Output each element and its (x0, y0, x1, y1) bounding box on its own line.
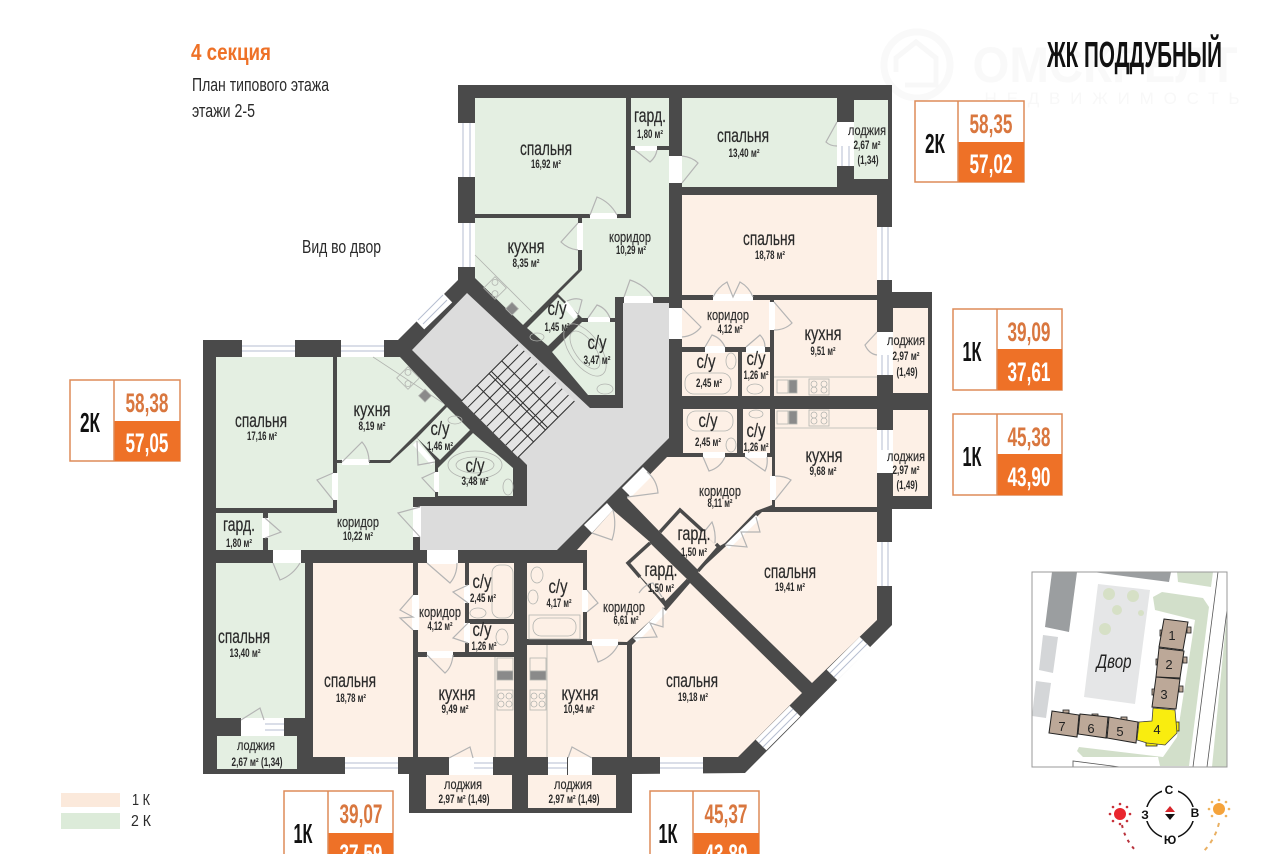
room label: corridor 4.12 south: 4,12 м² (428, 621, 453, 633)
compass: С (1165, 783, 1174, 797)
room label: bathroom 1.26 east: 1,26 м² (744, 370, 769, 382)
room label: bathroom 3.48: 3,48 м² (462, 476, 489, 488)
callout: 1K 45.37 (650, 791, 759, 854)
room label: corridor 10.22: 10,22 м² (343, 531, 373, 543)
room label: bathroom 3.48 (462, 456, 489, 488)
legend: 1 К (132, 792, 151, 809)
room label: bedroom 13.40 west (218, 627, 270, 660)
room label: loggia 2.97 east upper: лоджия (887, 332, 925, 348)
room label: loggia south 1: лоджия (444, 776, 482, 792)
room label: loggia 2.67 west: лоджия (237, 737, 275, 753)
map section 4 highlighted: 4 (1153, 722, 1161, 737)
callout: 1K 39.07: 1К (294, 818, 313, 849)
callout: 1K 39.09: 1К (962, 336, 982, 367)
room label: loggia south 2: 2,97 м² (1,49) (548, 794, 600, 806)
map building bumps (1063, 627, 1191, 746)
room label: kitchen 10.94 (562, 684, 598, 716)
room label: bathroom 4.17 (546, 577, 572, 610)
room label: kitchen 8.19 (354, 400, 390, 433)
room label: bedroom 18.78 south: 18,78 м² (336, 693, 366, 705)
room label: bathroom 2.45 east: 2,45 м² (696, 378, 722, 390)
room label: bathroom 2.45 east lower: с/у (698, 411, 718, 432)
room label: bathroom 1.46: 1,46 м² (427, 441, 453, 453)
room label: kitchen 9.51: кухня (804, 324, 842, 345)
map section 1: 1 (1168, 628, 1176, 643)
callout: 2K 58.38 (70, 380, 180, 461)
room label: bathroom 1.26 east: с/у (746, 349, 766, 370)
room label: loggia 2.97 east upper: (1,49) (896, 367, 918, 379)
plan subtitle: План типового этажа (192, 75, 330, 95)
room label: bathroom 2.45 south (470, 572, 496, 605)
room label: loggia 2.67 west (232, 737, 283, 769)
callout: 1K 39.07: 39,07 (340, 799, 382, 829)
room label: bathroom 1.26 east lower (744, 421, 769, 454)
door swings (241, 122, 877, 758)
room label: bathroom 1.26 south: 1,26 м² (472, 641, 497, 653)
room label: kitchen 9.49: 9,49 м² (442, 704, 469, 716)
room label: corridor 6.61: 6,61 м² (614, 615, 639, 627)
compass: В (1191, 806, 1200, 820)
room label: loggia 2.97 east lower (887, 448, 925, 492)
room label: bedroom 17.16: 17,16 м² (247, 431, 277, 443)
room label: corridor 6.61 (603, 599, 645, 627)
compass (1140, 783, 1200, 847)
callout: 1K 45.38 (953, 414, 1062, 495)
map section 3: 3 (1160, 687, 1168, 702)
room label: loggia south 1: 2,97 м² (1,49) (438, 794, 490, 806)
legend (61, 792, 152, 830)
green apartment rooms (216, 98, 888, 769)
room label: bathroom 3.47: 3,47 м² (584, 355, 611, 367)
room label: corridor 10.29 (609, 229, 651, 257)
map section 1 (1159, 619, 1188, 650)
room label: wardrobe 1.50 upper: 1,50 м² (681, 547, 707, 559)
room label: kitchen 9.49: кухня (438, 684, 476, 705)
room label: wardrobe 1.80 (634, 106, 666, 141)
room label: bedroom 19.41: 19,41 м² (775, 582, 805, 594)
wardrobe partitions (628, 510, 719, 604)
room label: bathroom 1.46: с/у (430, 419, 450, 440)
room label: corridor 4.12 east: коридор (707, 307, 749, 324)
room label: corridor 4.12 east (707, 307, 749, 336)
watermark logo: ОМСКРЕЛТ (972, 37, 1238, 93)
icon: sunset red sun (1109, 803, 1137, 852)
map section 4 highlighted (1137, 708, 1177, 745)
room label: wardrobe 1.80 west (223, 515, 255, 550)
map section 3 (1152, 677, 1180, 709)
room label: bedroom 17.16 (235, 411, 287, 443)
map section 6 (1078, 714, 1108, 738)
map section 5 (1107, 717, 1138, 743)
callout: 2K 58.35: 2К (925, 128, 946, 159)
callout: 2K 58.38: 57,05 (126, 428, 168, 458)
callout: 1K 45.38: 45,38 (1008, 422, 1050, 452)
room label: bedroom 13.40: спальня (717, 126, 769, 147)
callout: 2K 58.35 (915, 101, 1024, 182)
legend: 2 К (131, 813, 152, 830)
courtyard label: Двор (1095, 652, 1132, 673)
room label: bathroom 2.45 south: 2,45 м² (470, 593, 496, 605)
room label: bedroom 16.92: 16,92 м² (531, 159, 561, 171)
callout: 2K 58.38: 58,38 (126, 388, 168, 418)
compass: З (1141, 808, 1149, 822)
map section 2 (1156, 648, 1184, 678)
room label: bathroom 2.45 east (696, 352, 722, 390)
site map (1032, 572, 1227, 767)
room label: loggia 2.67: лоджия (848, 122, 886, 138)
room label: kitchen 9.68 (806, 446, 842, 478)
callout: 1K 45.37: 45,37 (704, 799, 748, 829)
callout: 2K 58.35: 58,35 (970, 109, 1012, 139)
room label: corridor 10.22 (337, 514, 379, 543)
room label: loggia 2.97 east lower: лоджия (887, 448, 925, 464)
room label: bedroom 17.16: спальня (235, 411, 287, 432)
room label: corridor 6.61: коридор (603, 599, 645, 616)
room label: bathroom 1.26 east lower: с/у (746, 421, 766, 442)
room label: loggia 2.67: 2,67 м² (854, 140, 881, 152)
room label: bathroom 2.45 east lower (695, 411, 721, 449)
room label: loggia south 1 (438, 776, 490, 806)
room label: corridor 4.12 south (419, 604, 461, 633)
room label: corridor 8.11 (699, 483, 741, 510)
room label: bathroom 1.46 (427, 419, 453, 453)
room label: bedroom 13.40 west: 13,40 м² (230, 648, 261, 660)
room label: bathroom 1.45 (544, 299, 570, 334)
room label: loggia 2.67: (1,34) (858, 155, 879, 167)
map section 7 (1049, 711, 1079, 737)
room label: wardrobe 1.50 lower: гард. (644, 560, 678, 581)
room label: loggia 2.67 west: 2,67 м² (1,34) (232, 757, 283, 769)
compass: Ю (1164, 833, 1176, 847)
room label: bedroom 19.41: спальня (764, 562, 816, 583)
room label: bedroom 13.40 (717, 126, 769, 160)
windows (242, 123, 893, 775)
room label: wardrobe 1.80: 1,80 м² (637, 129, 663, 141)
room label: loggia south 2: лоджия (554, 776, 592, 792)
room label: bedroom 13.40 west: спальня (218, 627, 270, 648)
callout: 1K 39.09: 37,61 (1008, 357, 1050, 387)
plan subtitle: этажи 2-5 (192, 101, 255, 121)
map section 2: 2 (1165, 657, 1173, 672)
room label: bathroom 2.45 east: с/у (696, 352, 716, 373)
section title: 4 секция (191, 39, 271, 65)
callout: 1K 39.09 (953, 309, 1062, 390)
room label: kitchen 8.35 (508, 237, 544, 270)
room label: kitchen 9.49 (438, 684, 476, 716)
room label: wardrobe 1.80: гард. (634, 106, 666, 127)
room label: bathroom 1.26 east (744, 349, 769, 382)
room label: wardrobe 1.50 upper: гард. (678, 524, 710, 545)
watermark logo: НЕДВИЖИМОСТЬ (984, 89, 1240, 108)
room label: bedroom 16.92 (520, 139, 572, 171)
room label: bathroom 1.26 south: с/у (472, 620, 492, 641)
room label: bedroom 19.18: 19,18 м² (678, 692, 708, 704)
room label: kitchen 10.94: 10,94 м² (564, 704, 595, 716)
room label: bedroom 18.78 east (743, 229, 795, 262)
room label: bedroom 18.78 east: спальня (743, 229, 795, 250)
room label: kitchen 8.35: кухня (508, 237, 544, 258)
room label: corridor 10.22: коридор (337, 514, 379, 531)
room label: loggia 2.97 east upper (887, 332, 925, 379)
room label: loggia 2.67 (848, 122, 886, 167)
peach apartment rooms (313, 195, 928, 809)
callout: 1K 39.07 (284, 791, 393, 854)
icon: sunrise orange sun (1202, 799, 1230, 853)
room label: wardrobe 1.80 west: 1,80 м² (226, 538, 252, 550)
sanitary and kitchen fixtures (373, 255, 877, 757)
room label: bathroom 4.17: 4,17 м² (546, 598, 572, 610)
room label: loggia 2.97 east lower: 2,97 м² (892, 465, 920, 477)
room label: corridor 10.29: коридор (609, 229, 651, 246)
room label: kitchen 9.51: 9,51 м² (810, 346, 836, 358)
room label: bedroom 18.78 east: 18,78 м² (755, 250, 785, 262)
room label: kitchen 9.51 (804, 324, 842, 358)
plan subtitle (192, 75, 330, 121)
room label: corridor 10.29: 10,29 м² (616, 245, 646, 257)
room label: wardrobe 1.50 upper (678, 524, 710, 559)
room label: corridor 8.11: коридор (699, 483, 741, 500)
room label: bathroom 1.45: 1,45 м² (544, 322, 570, 334)
room label: loggia 2.97 east upper: 2,97 м² (892, 351, 920, 363)
callout: 1K 45.38: 1К (962, 441, 982, 472)
room label: corridor 4.12 south: коридор (419, 604, 461, 621)
room label: wardrobe 1.50 lower: 1,50 м² (648, 583, 674, 595)
room label: kitchen 8.19: 8,19 м² (358, 421, 386, 433)
room label: bathroom 4.17: с/у (548, 577, 568, 598)
room label: bathroom 1.26 south (472, 620, 497, 653)
staircase (462, 345, 574, 457)
room label: wardrobe 1.50 lower (644, 560, 678, 595)
building walls (203, 85, 932, 813)
callout: 2K 58.38: 2К (80, 407, 101, 438)
room label: kitchen 10.94: кухня (562, 684, 598, 705)
room label: bathroom 3.47 (584, 333, 611, 367)
room label: bedroom 18.78 south (324, 671, 376, 705)
room label: kitchen 9.68: 9,68 м² (810, 466, 837, 478)
room label: loggia south 2 (548, 776, 600, 806)
room label: bedroom 16.92: спальня (520, 139, 572, 160)
callout: 2K 58.35: 57,02 (970, 149, 1012, 179)
room label: bedroom 19.18 (666, 671, 718, 704)
room label: bathroom 2.45 south: с/у (472, 572, 492, 593)
room label: kitchen 8.19: кухня (354, 400, 390, 421)
room label: bedroom 13.40: 13,40 м² (728, 148, 760, 160)
room label: bedroom 19.18: спальня (666, 671, 718, 692)
room label: corridor 8.11: 8,11 м² (708, 498, 733, 510)
map section 6: 6 (1087, 721, 1095, 736)
room label: bedroom 18.78 south: спальня (324, 671, 376, 692)
callout: 1K 45.38: 43,90 (1008, 462, 1050, 492)
room label: bathroom 3.48: с/у (466, 456, 485, 477)
room label: bathroom 2.45 east lower: 2,45 м² (695, 437, 721, 449)
common area (412, 293, 669, 550)
door openings (241, 122, 893, 775)
callout: 1K 39.09: 39,09 (1008, 317, 1050, 347)
room label: bathroom 1.26 east lower: 1,26 м² (744, 442, 769, 454)
room label: bathroom 1.45: с/у (548, 299, 567, 320)
callout: 1K 45.37: 1К (658, 818, 678, 849)
room label: wardrobe 1.80 west: гард. (223, 515, 255, 536)
map section 7: 7 (1058, 719, 1066, 734)
room label: kitchen 8.35: 8,35 м² (512, 258, 540, 270)
room label: kitchen 9.68: кухня (806, 446, 842, 467)
watermark logo (884, 32, 1240, 108)
map section 5: 5 (1116, 724, 1124, 739)
courtyard view note: Вид во двор (302, 237, 381, 257)
room label: loggia 2.97 east lower: (1,49) (896, 480, 918, 492)
room label: bathroom 3.47: с/у (588, 333, 607, 354)
room label: corridor 4.12 east: 4,12 м² (718, 324, 743, 336)
room label: bedroom 19.41 (764, 562, 816, 594)
